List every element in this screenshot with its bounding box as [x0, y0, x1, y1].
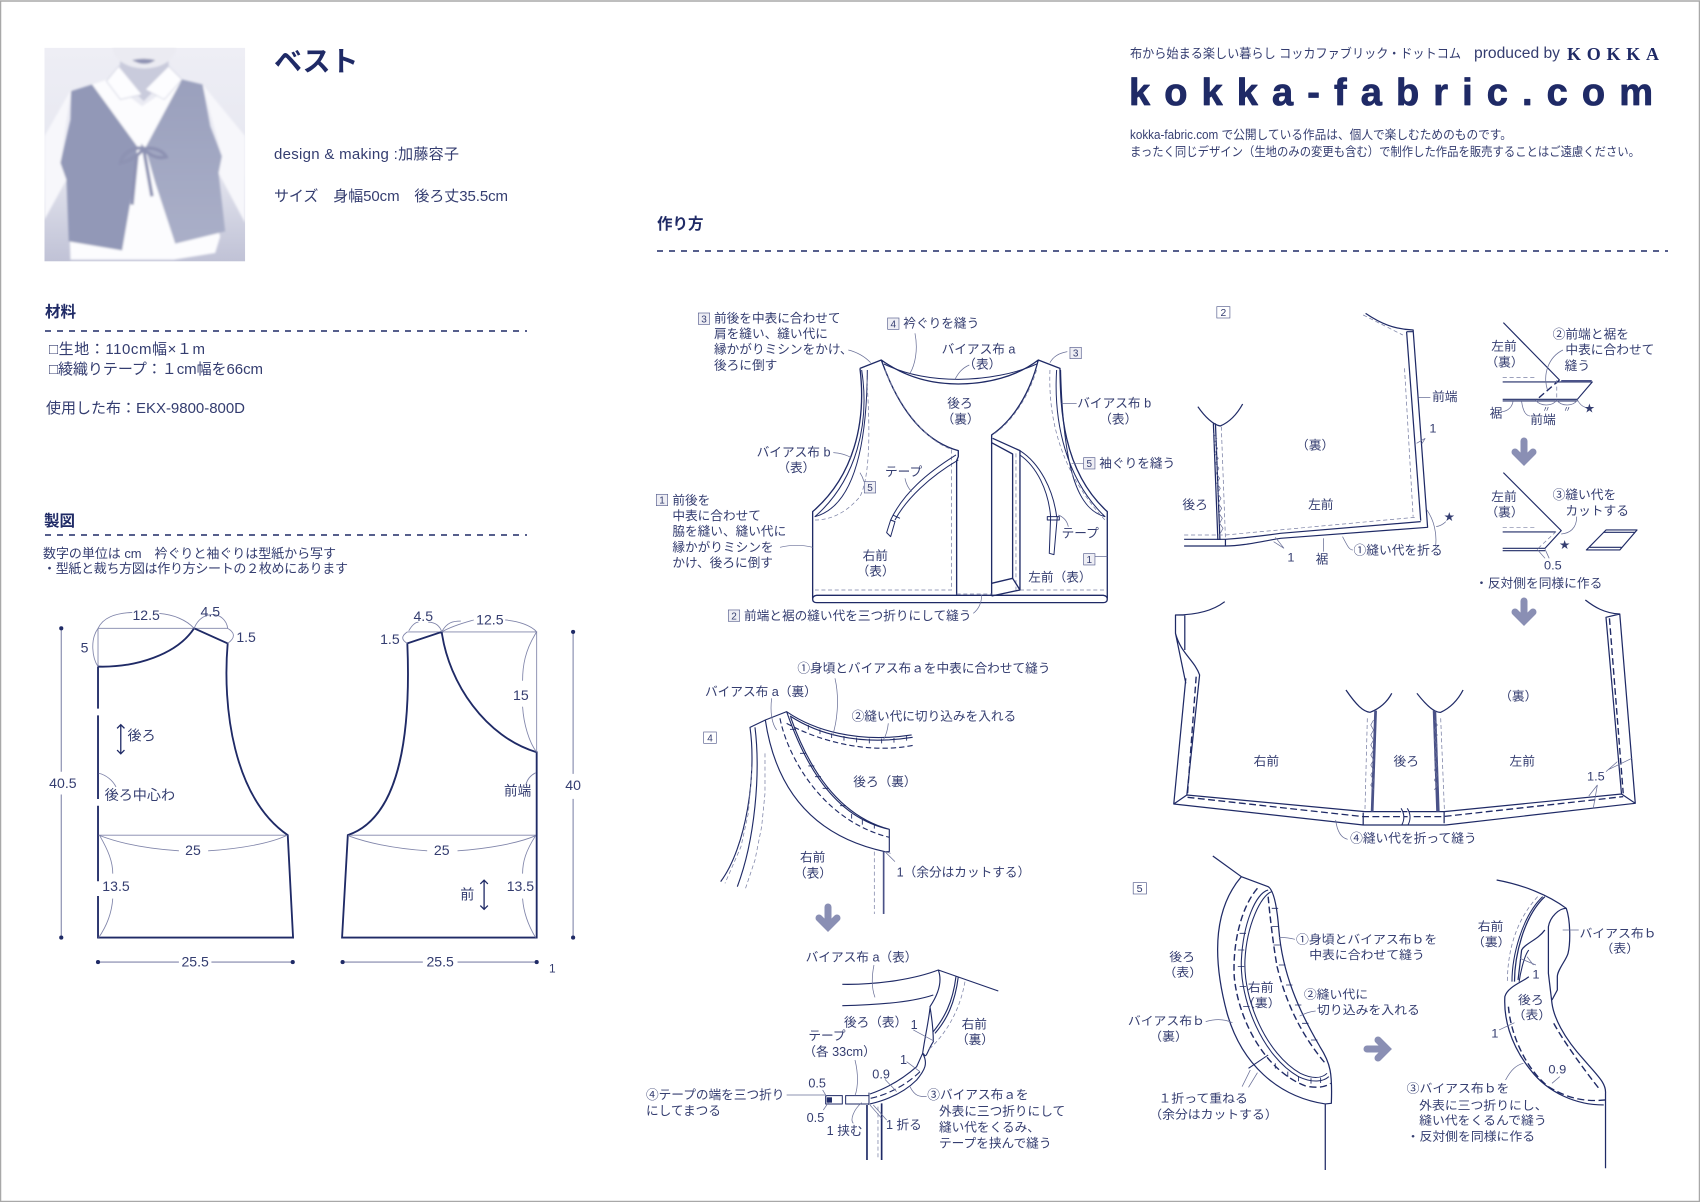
back labels: 12.5 [132, 607, 160, 623]
front labels [380, 608, 581, 975]
step labels: 前後を [672, 492, 710, 507]
step 2 labels: 1 [1287, 551, 1295, 565]
back labels: 5 [81, 640, 89, 656]
step labels: 右前 [863, 548, 888, 563]
step 4 lower labels: 0.5 [807, 1111, 824, 1125]
step labels: 左前（表） [1028, 570, 1092, 585]
step 4 labels: 後ろ（裏） [853, 775, 917, 789]
draft: front piece [341, 608, 581, 975]
heading: how to make: 作り方 [657, 214, 704, 233]
step 2 finished labels: 左前 [1510, 754, 1535, 769]
step labels: 肩を縫い、縫い代に [714, 327, 828, 341]
corner detail: sew front edge and hem: 縫う [1565, 359, 1590, 373]
usage notice [1130, 127, 1640, 159]
step 5 left labels: １折って重ねる [1159, 1091, 1248, 1106]
grain arrow [480, 880, 488, 909]
step 4 lower labels: 1 [900, 1053, 907, 1067]
corner detail: sew front edge and hem: 〃 [1563, 405, 1571, 414]
step labels [656, 311, 1175, 623]
heading: materials: 材料 [45, 302, 77, 321]
corner detail: cut seam allowance: カットする [1565, 504, 1629, 518]
corner detail: sew front edge and hem: 〃 [1542, 405, 1551, 414]
back labels [49, 604, 256, 969]
step 5 left labels: 切り込みを入れる [1317, 1003, 1420, 1017]
step 5 left labels: 後ろ [1169, 950, 1195, 964]
step 5 left labels: 右前 [1248, 980, 1273, 995]
step labels: バイアス布 b [1077, 397, 1151, 411]
step 4 lower labels: （裏） [956, 1033, 994, 1047]
step labels: （表） [857, 564, 895, 578]
step 2 finished labels: ④縫い代を折って縫う [1350, 832, 1477, 846]
step 5 right labels: 1 [1532, 968, 1540, 981]
heading: pattern draft: 製図 [44, 512, 75, 530]
corner detail: cut seam allowance [1475, 473, 1637, 590]
corner detail: sew front edge and hem: 左前 [1491, 339, 1517, 354]
grain arrow [117, 725, 124, 754]
corner detail: cut seam allowance: 左前 [1491, 489, 1517, 504]
step 2 labels [1182, 389, 1458, 566]
back labels: 4.5 [201, 604, 220, 620]
corner detail: sew front edge and hem: ★ [1584, 404, 1595, 415]
step 5 right labels: ③バイアス布ｂを [1407, 1082, 1509, 1096]
step labels: （表） [777, 461, 815, 475]
corner detail: cut seam allowance: 0.5 [1544, 558, 1562, 572]
step 5 right labels: 外表に三つ折りにし、 [1419, 1098, 1548, 1112]
pattern drafts: back and front [49, 604, 581, 975]
step labels: 5 [1087, 459, 1093, 470]
usage notice: まったく同じデザイン（生地のみの変更も含む）で制作した作品を販売することはご遠慮ください。 [1130, 144, 1640, 159]
step 5 right labels: （表） [1601, 942, 1639, 956]
title: ベスト [274, 46, 359, 77]
materials list: 使用した布：EKX-9800-800D [46, 400, 245, 417]
corner detail: sew front edge and hem: （裏） [1485, 356, 1524, 370]
step 4 lower labels [646, 951, 1065, 1151]
step 5 right drawing [1497, 880, 1606, 1168]
step 4 lower labels: ④テープの端を三つ折り [646, 1088, 784, 1102]
step 4 labels: バイアス布 a（裏） [705, 685, 817, 699]
step 5 right labels [1407, 919, 1657, 1144]
front labels: 前 [460, 887, 474, 903]
corner detail: sew front edge and hem: 中表に合わせて [1565, 343, 1654, 357]
front labels: 4.5 [413, 608, 433, 624]
step 2 labels: ①縫い代を折る [1354, 543, 1443, 557]
diagram: step 4 bias tape folded with ties [646, 951, 1065, 1160]
step 2 finished labels: 1.5 [1587, 770, 1605, 784]
corner detail: cut seam allowance: ★ [1560, 540, 1570, 551]
designer credit: design & making :加藤容子 [274, 146, 459, 163]
step 5 right labels: 右前 [1478, 919, 1503, 934]
back labels: 後ろ [128, 727, 156, 743]
step 4 lower labels: 0.5 [808, 1077, 826, 1091]
diagram: step 2 front edge and hem folded [1182, 307, 1654, 590]
step 4 lower labels: ③バイアス布ａを [927, 1088, 1029, 1102]
logo: kokka-fabric.com: kokka-fabric.com [1129, 72, 1653, 114]
diagram: step 4 bias tape a sewn to neckline [704, 661, 1050, 914]
step labels: 縁かがりミシンをかけ、 [714, 343, 853, 357]
step 5 right labels: 後ろ [1518, 993, 1544, 1007]
step labels: 3 [701, 314, 707, 325]
dimension: 25.5 width [98, 961, 293, 963]
step 2 finished labels: （裏） [1499, 690, 1537, 704]
step 4 lower labels: 1 [911, 1018, 918, 1032]
step 4 labels [705, 661, 1050, 880]
step 4 lower labels: バイアス布 a（表） [806, 951, 917, 965]
step 2 labels: 前端 [1432, 389, 1458, 404]
step 4 labels: ①身頃とバイアス布ａを中表に合わせて縫う [797, 661, 1050, 676]
step 5 left labels: （表） [1164, 966, 1202, 979]
step 2 labels: 裾 [1316, 552, 1328, 566]
front labels: 12.5 [476, 611, 504, 627]
step labels: 脇を縫い、縫い代に [672, 525, 786, 539]
step 5 right labels: ・反対側を同様に作る [1407, 1129, 1535, 1144]
diagram: step 5 armhole bias tape sewn [1128, 856, 1657, 1170]
diagram: finished vest overview with steps 1-5 [656, 311, 1175, 623]
step labels: 4 [891, 319, 897, 330]
step 4 lower labels: テープ [808, 1029, 846, 1043]
step 5 right labels: バイアス布ｂ [1579, 927, 1657, 940]
back labels: 40.5 [49, 775, 77, 791]
site tagline: 布から始まる楽しい暮らし コッカファブリック・ドットコム [1130, 46, 1461, 61]
step labels: 1 [1087, 555, 1093, 566]
step 5 left labels: （裏） [1242, 996, 1281, 1010]
step 4 lower labels: テープを挟んで縫う [939, 1137, 1051, 1151]
corner detail: sew front edge and hem: ②前端と裾を [1553, 327, 1629, 341]
usage notice: kokka-fabric.com で公開している作品は、個人で楽しむためのものです。 [1130, 127, 1512, 142]
step labels: 2 [731, 611, 737, 622]
step 5 left labels: ①身頃とバイアス布ｂを [1296, 932, 1437, 946]
step labels: 3 [1073, 349, 1079, 360]
step labels: 袖ぐりを縫う [1099, 457, 1175, 471]
front labels: 13.5 [507, 878, 534, 894]
arrow: corner detail down [1515, 441, 1533, 461]
step 5 left labels: （余分はカットする） [1149, 1108, 1278, 1121]
step 4 lower labels: 外表に三つ折りにして [939, 1105, 1065, 1119]
step labels: かけ、後ろに倒す [672, 556, 773, 570]
step 2 finished labels: 後ろ [1394, 755, 1419, 769]
step 5 right labels: 1 [1491, 1027, 1499, 1041]
arrow: to finished hem [1515, 601, 1533, 621]
step 5 left labels [1128, 932, 1437, 1121]
step 2 finished labels [1254, 690, 1605, 846]
step labels: バイアス布 a [942, 342, 1016, 356]
step 4 lower labels: 右前 [962, 1016, 987, 1031]
step 4 lower labels: にしてまつる [646, 1104, 721, 1118]
diagram: step 2 hem stitched across fronts and back [1174, 600, 1635, 846]
produced by: produced by [1474, 45, 1560, 62]
step 2 finished labels: 右前 [1254, 754, 1279, 769]
arrow: step 5 right [1367, 1040, 1387, 1058]
step 5 right labels: 縫い代をくるんで縫う [1419, 1113, 1547, 1128]
arrow: step 4 down [819, 907, 837, 927]
dimension: 25.5 width [343, 961, 537, 963]
step 5 right labels: （表） [1513, 1008, 1551, 1022]
step labels: 中表に合わせて [672, 509, 761, 523]
pattern notes [43, 546, 348, 576]
step 4 labels: （表） [794, 866, 832, 880]
step 4 lower labels: 0.9 [872, 1067, 890, 1081]
tape left and right [887, 451, 1059, 555]
step 5 right labels: 0.9 [1548, 1063, 1566, 1076]
step 4 lower labels: 後ろ（表） [844, 1016, 907, 1030]
step labels: 後ろ [947, 397, 973, 411]
back labels: 1.5 [236, 629, 256, 645]
step 4 lower labels: 1 折る [886, 1118, 922, 1132]
materials list: □綾織りテープ：１cm幅を66cm [49, 361, 263, 378]
step 2 labels: 1 [1429, 422, 1436, 436]
front labels: 40 [565, 777, 581, 793]
size info: サイズ 身幅50cm 後ろ丈35.5cm [274, 188, 508, 205]
draft: back piece [49, 604, 295, 969]
photo: woman wearing vest [44, 27, 245, 261]
front labels: 1.5 [380, 631, 400, 647]
step labels: 1 [659, 496, 665, 507]
step labels: 前後を中表に合わせて [714, 311, 841, 326]
dimension: 40 height [572, 632, 574, 938]
step labels: 5 [867, 483, 873, 494]
materials list [46, 341, 263, 417]
step 4 lower labels: 縫い代をくるみ、 [939, 1121, 1040, 1135]
step 4 labels: 右前 [800, 850, 825, 865]
step 4 labels: ②縫い代に切り込みを入れる [852, 710, 1016, 724]
step labels: 縁かがりミシンを [672, 540, 774, 554]
step 5 right labels: （裏） [1472, 935, 1511, 949]
step labels: 衿ぐりを縫う [903, 317, 979, 331]
front labels: 前端 [504, 783, 531, 799]
back labels: 後ろ中心わ [105, 787, 175, 803]
corner detail: cut seam allowance: （裏） [1485, 506, 1524, 520]
pattern notes: 数字の単位は cm 衿ぐりと袖ぐりは型紙から写す [43, 546, 336, 561]
step 5 left labels: 中表に合わせて縫う [1309, 947, 1425, 962]
step labels: バイアス布 b [757, 446, 830, 460]
step 2 labels: （裏） [1296, 438, 1334, 452]
corner detail: cut seam allowance: ・反対側を同様に作る [1475, 576, 1602, 590]
diagram: step 5 armhole bias tape sewn: 5 [1137, 884, 1143, 895]
back labels: 25 [185, 842, 201, 858]
step labels: （表） [963, 358, 1001, 372]
dimension: 40.5 height [60, 628, 62, 938]
corner detail: sew front edge and hem [1485, 323, 1654, 427]
corner detail: cut seam allowance: ③縫い代を [1553, 488, 1616, 502]
corner detail: sew front edge and hem: 裾 [1490, 407, 1502, 421]
step labels: テープ [1062, 527, 1099, 541]
step labels: 後ろに倒す [714, 358, 777, 372]
diagram: step 4 bias tape a sewn to neckline: 4 [707, 733, 713, 744]
step 4 lower labels: （各 33cm） [803, 1044, 876, 1059]
step 4 lower labels: 1 挟む [827, 1124, 863, 1138]
front labels: 25.5 [426, 953, 454, 969]
corner detail: sew front edge and hem: 前端 [1530, 412, 1556, 427]
KOKKA wordmark: KOKKA [1567, 44, 1659, 64]
front labels: 25 [434, 842, 450, 858]
pattern notes: ・型紙と裁ち方図は作り方シートの２枚めにあります [43, 561, 348, 576]
materials list: □生地：110cm幅×１m [49, 341, 205, 358]
front labels: 1 [549, 961, 556, 975]
step labels: （表） [1099, 412, 1137, 426]
step 5 left labels: （裏） [1149, 1030, 1188, 1044]
step labels: 前端と裾の縫い代を三つ折りにして縫う [744, 608, 971, 623]
front labels: 15 [513, 687, 529, 703]
diagram: step 2 front edge and hem folded: 2 [1220, 308, 1227, 319]
step 4 labels: 1（余分はカットする） [897, 866, 1030, 880]
step 2 labels: 後ろ [1182, 498, 1208, 512]
step labels: テープ [885, 465, 923, 479]
step 2 labels: ★ [1444, 512, 1454, 523]
step 5 left labels: バイアス布ｂ [1128, 1014, 1205, 1028]
step 2 labels: 左前 [1308, 497, 1334, 512]
step 5 left labels: ②縫い代に [1304, 987, 1368, 1001]
step labels: （裏） [942, 412, 980, 426]
back labels: 13.5 [102, 878, 130, 894]
leaders [780, 333, 1107, 613]
back labels: 25.5 [181, 953, 209, 969]
